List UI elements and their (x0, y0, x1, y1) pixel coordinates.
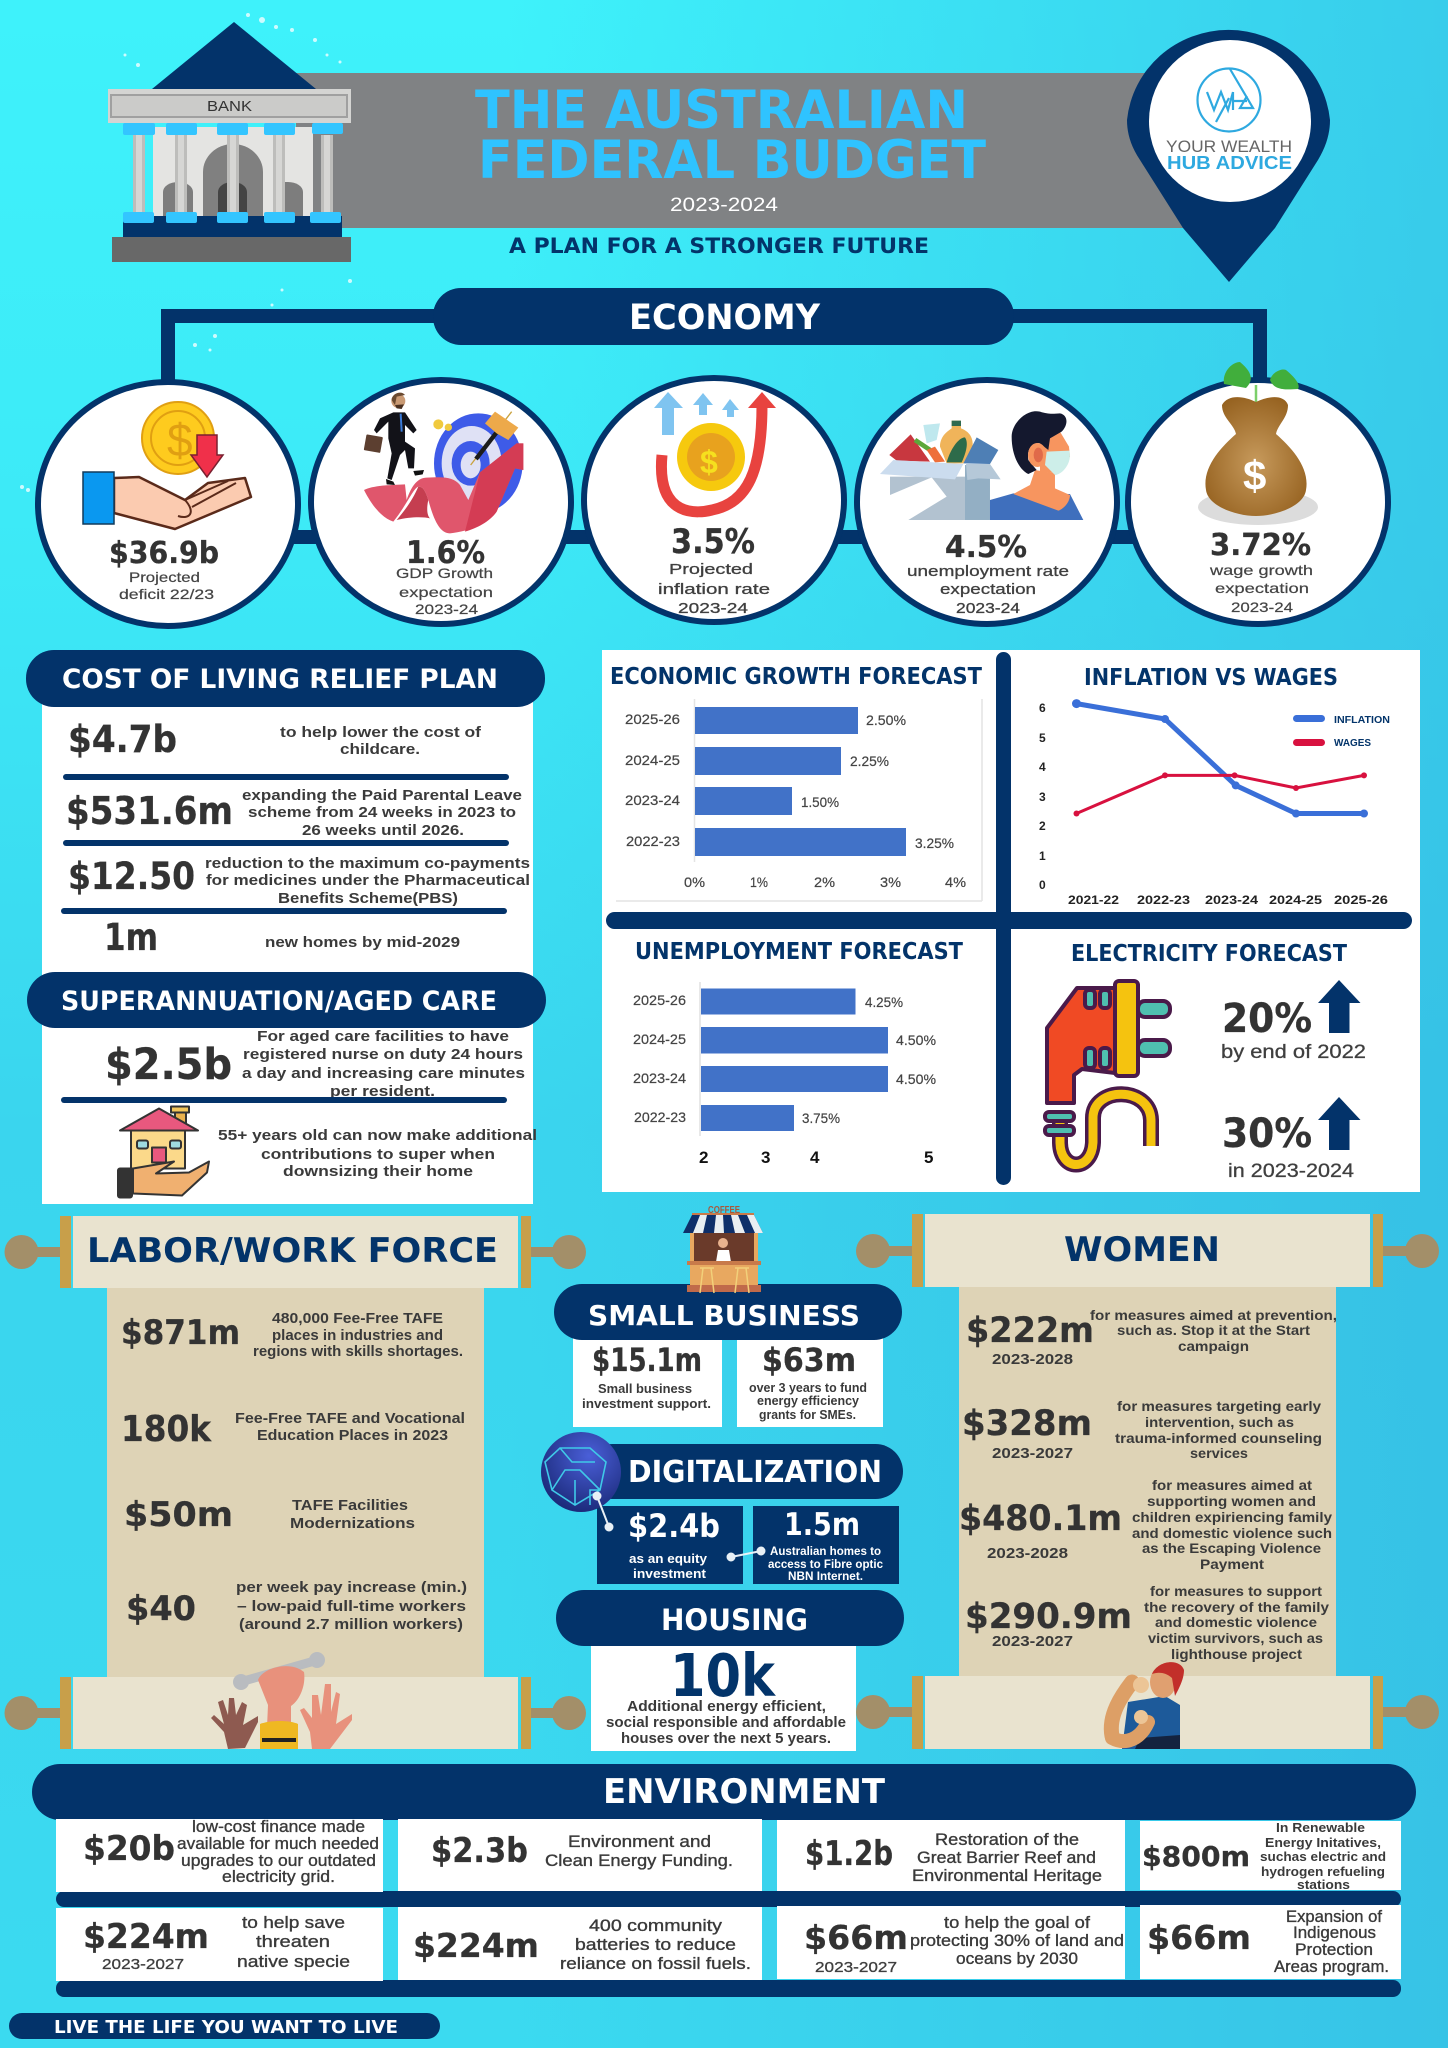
stat: new homes: new homes by mid-2029 (265, 934, 460, 951)
stat: vocational places: 180k (121, 1409, 212, 1450)
panel: gdp growth stat (311, 380, 571, 624)
stat: fee-free TAFE places: places in industries and (272, 1327, 443, 1344)
panel: deficit stat: $36.9b (109, 536, 219, 571)
card: great barrier reef: Great Barrier Reef and (917, 1849, 1096, 1867)
panel: electricity forecast: by end of 2022 (1221, 1042, 1366, 1063)
icon: circuit globe (541, 1432, 621, 1512)
chart: economic growth forecast (610, 664, 982, 901)
card: native species: native specie (237, 1953, 350, 1971)
panel: inflation stat: inflation rate (658, 581, 770, 598)
heading: cost of living relief plan: COST OF LIVING RELIEF PLAN (62, 664, 498, 695)
stat: childcare: childcare. (340, 741, 420, 758)
panel: wage growth stat: expectation (1215, 580, 1309, 596)
header: grey title band (296, 73, 1196, 228)
card: clean energy funding: Environment and (568, 1833, 711, 1851)
chart: inflation vs wages: 6 (1039, 701, 1046, 715)
chart: economic growth forecast: 2.50% (866, 712, 906, 728)
stat: fee-free TAFE places: $871m (121, 1313, 240, 1353)
stat: family violence support: supporting women and (1147, 1493, 1316, 1509)
stat: vocational places: Fee-Free TAFE and Vocational (235, 1410, 465, 1427)
stat: survivors recovery: for measures to support (1150, 1583, 1322, 1599)
chart: economic growth forecast: ECONOMIC GROWTH FORECAST (610, 664, 982, 690)
chart: economic growth forecast: 2023-24 (625, 792, 680, 808)
chart: inflation vs wages: 2022-23 (1137, 893, 1190, 907)
card: renewable energy: In Renewable (1276, 1820, 1365, 1835)
panel: electricity forecast (1045, 941, 1366, 1182)
stat: investment support: Small business (598, 1381, 692, 1396)
panel: inflation stat: 2023-24 (678, 600, 748, 617)
panel: electricity forecast: 20% (1222, 996, 1312, 1042)
text: housing detail: Additional energy efficient, (627, 1698, 826, 1715)
stat: medicines: Benefits Scheme(PBS) (278, 890, 458, 907)
heading: environment: ENVIRONMENT (603, 1772, 886, 1812)
stat: aged care: a day and increasing care minutes (242, 1065, 525, 1082)
chart: economic growth forecast: 3% (880, 874, 901, 890)
card: renewable energy: hydrogen refueling (1261, 1864, 1385, 1879)
stat: parental leave: 26 weeks until 2026. (302, 822, 464, 839)
stat: pay increase: per week pay increase (min.) (236, 1579, 467, 1596)
stat: fee-free TAFE places (121, 1310, 463, 1360)
heading: superannuation aged care: SUPERANNUATION/AGED CARE (61, 986, 497, 1017)
subtitle: year: 2023-2024 (670, 195, 778, 216)
icon: money bag with sprout: $ (1243, 452, 1266, 499)
stat: prevention: 2023-2028 (992, 1351, 1073, 1368)
chart: unemployment forecast: UNEMPLOYMENT FORECAST (635, 939, 963, 965)
card: native species: to help save (242, 1914, 345, 1932)
card: protecting land and oceans: oceans by 2030 (956, 1950, 1078, 1968)
panel: small business (554, 1205, 902, 1427)
stat: aged care: registered nurse on duty 24 hours (243, 1046, 523, 1063)
card: grid upgrades: electricity grid. (222, 1868, 335, 1886)
icon: electric plug (1045, 981, 1170, 1164)
panel: electricity forecast: 30% (1222, 1111, 1312, 1157)
card: grid upgrades: low-cost finance made (192, 1818, 365, 1836)
stat: prevention: campaign (1178, 1338, 1249, 1354)
heading: small business: SMALL BUSINESS (588, 1299, 860, 1332)
card: indigenous protection: $66m (1147, 1918, 1251, 1957)
stat: energy grants (749, 1341, 867, 1422)
stat: aged care: For aged care facilities to have (257, 1028, 509, 1045)
stat: aged care (105, 1028, 525, 1100)
panel: electricity forecast: in 2023-2024 (1228, 1161, 1354, 1182)
stat: fee-free TAFE places: regions with skills shortages. (253, 1343, 463, 1360)
card: grid upgrades: upgrades to our outdated (181, 1852, 376, 1870)
heading: housing: HOUSING (661, 1603, 808, 1637)
chart: inflation vs wages: 4 (1039, 760, 1046, 774)
heading: cost of living relief plan (26, 650, 545, 707)
icon: coin with rising arrows (654, 392, 776, 512)
stat: early intervention: $328m (962, 1404, 1092, 1444)
card: protecting land and oceans: 2023-2027 (815, 1959, 897, 1976)
stat: prevention: $222m (966, 1311, 1094, 1351)
chart: inflation vs wages: WAGES (1334, 738, 1371, 749)
heading: economy: ECONOMY (629, 298, 821, 338)
stat: family violence support: 2023-2028 (987, 1545, 1068, 1562)
panel: electricity forecast: ELECTRICITY FORECAST (1071, 941, 1347, 967)
card: indigenous protection: Protection (1295, 1941, 1373, 1959)
stat: energy grants: $63m (762, 1341, 856, 1379)
heading: women: WOMEN (1064, 1230, 1220, 1270)
panel: wage growth stat: 2023-24 (1231, 599, 1293, 615)
panel: women scroll (856, 1214, 1439, 1749)
card: community batteries: $224m (413, 1926, 539, 1965)
panel: gdp growth stat: 2023-24 (415, 601, 478, 617)
stat: aged care: per resident. (330, 1083, 435, 1100)
icon: coffee stall (683, 1205, 763, 1293)
stat: aged care: $2.5b (105, 1040, 232, 1090)
chart: economic growth forecast: 2025-26 (625, 711, 680, 727)
panel: forecast charts (602, 650, 1420, 1192)
card: native species: $224m (83, 1917, 209, 1957)
chart: unemployment forecast: 3 (761, 1148, 770, 1167)
chart: inflation vs wages: 0 (1039, 878, 1046, 892)
card: grid upgrades (56, 1818, 383, 1892)
stat: survivors recovery: $290.9m (965, 1597, 1132, 1637)
panel: unemployment stat (857, 380, 1117, 624)
panel: inflation stat: 3.5% (671, 522, 755, 562)
chart: inflation vs wages: 2 (1039, 819, 1046, 833)
stat: family violence support: $480.1m (959, 1499, 1122, 1539)
card: community batteries (398, 1907, 762, 1980)
heading: digitalization (585, 1444, 903, 1499)
stat: family violence support: as the Escaping Violence (1142, 1540, 1321, 1556)
stat: early intervention: trauma-informed counseling (1115, 1430, 1322, 1446)
stat: survivors recovery: the recovery of the family (1144, 1599, 1329, 1615)
card: native species: 2023-2027 (102, 1956, 184, 1973)
chart: unemployment forecast: 2025-26 (633, 992, 686, 1008)
card: native species: threaten (256, 1933, 330, 1951)
stat: pay increase: $40 (126, 1589, 196, 1629)
icon: bank building (108, 22, 351, 262)
card: native species (56, 1908, 383, 1981)
text: downsizing contributions: downsizing their home (283, 1163, 473, 1180)
chart: unemployment forecast: 5 (924, 1148, 933, 1167)
panel: wage growth stat: 3.72% (1210, 528, 1311, 563)
stat: pay increase: – low-paid full-time workers (237, 1598, 466, 1615)
panel: cost of living and superannuation (26, 650, 546, 1204)
stat: family violence support: and domestic violence such (1132, 1525, 1332, 1541)
stat: TAFE facilities: TAFE Facilities (292, 1497, 408, 1514)
stat: childcare: $4.7b (68, 718, 177, 761)
chart: unemployment forecast: 2023-24 (633, 1070, 686, 1086)
chart: inflation vs wages: INFLATION (1334, 715, 1390, 726)
icon: money bag with sprout (1198, 362, 1318, 525)
stat: early intervention (962, 1398, 1322, 1462)
card: indigenous protection: Indigenous (1293, 1924, 1376, 1942)
panel: digitalization (541, 1432, 903, 1584)
panel: deficit stat: Projected (129, 569, 200, 585)
heading: economy (433, 288, 1014, 345)
stat: survivors recovery (965, 1583, 1329, 1662)
heading: housing (556, 1590, 904, 1646)
icon: raised hands with wrench (211, 1652, 352, 1749)
text: housing detail (606, 1698, 846, 1747)
chart: inflation vs wages: 2025-26 (1334, 893, 1388, 907)
stat: family violence support (959, 1477, 1332, 1572)
icon: coin over hand (83, 402, 251, 529)
chart: unemployment forecast: 4.50% (896, 1032, 936, 1048)
stat: family violence support: children expiriencing family (1132, 1509, 1332, 1525)
stat: parental leave: $531.6m (66, 789, 233, 833)
footer: slogan pill: LIVE THE LIFE YOU WANT TO LIVE (54, 2017, 398, 2038)
stat: equity investment: $2.4b (628, 1507, 720, 1545)
icon: bank building: BANK (207, 98, 252, 115)
card: great barrier reef: Environmental Heritage (912, 1867, 1102, 1885)
heading: environment (32, 1764, 1416, 1820)
panel: unemployment stat: 4.5% (945, 530, 1027, 565)
icon: location pin logo: YOUR WEALTH (1166, 137, 1292, 156)
stat: investment support: $15.1m (592, 1341, 702, 1379)
text: housing detail: social responsible and affordable (606, 1714, 846, 1731)
stat: equity investment: investment (633, 1566, 707, 1581)
card: grid upgrades: available for much needed (177, 1835, 379, 1853)
card: great barrier reef: Restoration of the (935, 1831, 1079, 1849)
panel: unemployment stat: unemployment rate (907, 563, 1069, 580)
chart: inflation vs wages: 1 (1039, 849, 1046, 863)
chart: unemployment forecast: 2 (699, 1148, 708, 1167)
stat: pay increase (126, 1579, 467, 1633)
stat: fibre homes (768, 1507, 883, 1583)
chart: economic growth forecast: 1.50% (801, 794, 839, 810)
text: downsizing contributions (218, 1127, 537, 1180)
panel: labor and work force scroll (4, 1216, 586, 1749)
card: renewable energy: suchas electric and (1260, 1849, 1386, 1864)
title: FEDERAL BUDGET (478, 130, 986, 191)
chart: economic growth forecast: 2% (814, 874, 835, 890)
stat: energy grants: over 3 years to fund (749, 1380, 867, 1395)
stat: medicines: reduction to the maximum co-payments (205, 855, 530, 872)
heading: small business (554, 1284, 902, 1340)
chart: inflation vs wages: 2021-22 (1068, 893, 1119, 907)
stat: equity investment: as an equity (629, 1551, 708, 1566)
text: downsizing contributions: 55+ years old can now make additional (218, 1127, 537, 1144)
stat: fibre homes: Australian homes to (770, 1544, 881, 1558)
chart: economic growth forecast: 1% (750, 874, 768, 890)
card: community batteries: 400 community (589, 1917, 723, 1935)
panel: deficit stat: deficit 22/23 (119, 586, 214, 602)
stat: energy grants: grants for SMEs. (759, 1407, 856, 1422)
stat: early intervention: for measures targeting early (1117, 1398, 1321, 1414)
stat: new homes (104, 916, 460, 959)
stat: prevention (966, 1307, 1337, 1368)
chart: unemployment forecast: 2022-23 (634, 1109, 686, 1125)
chart: inflation vs wages: 3 (1039, 790, 1046, 804)
stat: fibre homes: NBN Internet. (788, 1569, 863, 1583)
icon: coffee stall: COFFEE (708, 1205, 740, 1216)
card: community batteries: batteries to reduce (575, 1936, 736, 1954)
panel: housing: 10k (670, 1641, 777, 1710)
stat: early intervention: intervention, such as (1145, 1414, 1294, 1430)
panel: inflation stat: Projected (669, 561, 753, 578)
stat: survivors recovery: lighthouse project (1171, 1646, 1302, 1662)
card: community batteries: reliance on fossil fuels. (560, 1955, 751, 1973)
chart: economic growth forecast: 2.25% (850, 753, 889, 769)
stat: fibre homes: 1.5m (784, 1507, 860, 1543)
stat: equity investment (628, 1507, 720, 1581)
panel: gdp growth stat: GDP Growth (396, 565, 493, 581)
heading: digitalization: DIGITALIZATION (628, 1455, 882, 1490)
heading: superannuation aged care (27, 972, 546, 1028)
icon: woman flexing arm (1111, 1662, 1184, 1749)
panel: wage growth stat (1128, 362, 1388, 624)
chart: unemployment forecast: 4 (810, 1148, 820, 1167)
stat: medicines: $12.50 (68, 855, 195, 898)
economy connector lines (168, 316, 1260, 382)
panel: housing (556, 1590, 904, 1751)
icon: businessman target and arrow (364, 393, 523, 533)
stat: TAFE facilities: Modernizations (290, 1515, 415, 1532)
chart: inflation vs wages: 2024-25 (1269, 893, 1322, 907)
icon: up arrow (1318, 1097, 1360, 1150)
chart: economic growth forecast: 3.25% (915, 835, 954, 851)
panel: unemployment stat: expectation (940, 581, 1036, 598)
stat: medicines: for medicines under the Pharmaceutical (206, 872, 530, 889)
icon: coin over hand: $ (167, 414, 193, 466)
tagline: A PLAN FOR A STRONGER FUTURE (509, 234, 929, 258)
stat: childcare (68, 718, 482, 761)
chart: economic growth forecast: 2022-23 (626, 833, 680, 849)
card: great barrier reef: $1.2b (805, 1834, 893, 1874)
footer: slogan pill (9, 2013, 440, 2039)
chart: economic growth forecast: 0% (684, 874, 705, 890)
icon: grocery box and masked person (880, 411, 1083, 520)
panel: environment (32, 1764, 1416, 1997)
economy connector between circles (168, 530, 1258, 544)
panel: wage growth stat: wage growth (1209, 562, 1313, 578)
card: protecting land and oceans: protecting 30% of land and (910, 1932, 1124, 1950)
stat: parental leave (66, 787, 522, 839)
icon: house on a hand (118, 1106, 209, 1198)
stat: parental leave: scheme from 24 weeks in 2023 to (248, 804, 516, 821)
stat: medicines (68, 855, 530, 907)
stat: investment support: investment support. (582, 1396, 711, 1411)
text: housing detail: houses over the next 5 years. (621, 1730, 831, 1747)
chart: economic growth forecast: 4% (945, 874, 966, 890)
stat: vocational places: Education Places in 2023 (257, 1427, 448, 1444)
card: indigenous protection (1140, 1905, 1401, 1979)
card: grid upgrades: $20b (83, 1829, 175, 1869)
stat: family violence support: for measures aimed at (1152, 1477, 1312, 1493)
stat: vocational places (121, 1409, 465, 1450)
stat: pay increase: (around 2.7 million workers) (239, 1616, 463, 1633)
stat: TAFE facilities: $50m (124, 1495, 233, 1535)
network node lines (594, 1492, 764, 1560)
card: protecting land and oceans (777, 1906, 1125, 1979)
stat: prevention: such as. Stop it at the Start (1117, 1322, 1310, 1338)
stat: fee-free TAFE places: 480,000 Fee-Free TAFE (272, 1310, 443, 1327)
stat: new homes: 1m (104, 916, 158, 959)
icon: up arrow (1318, 980, 1360, 1033)
chart: inflation vs wages: 2023-24 (1205, 893, 1258, 907)
stat: investment support (582, 1341, 711, 1411)
stat: family violence support: Payment (1200, 1556, 1264, 1572)
card: clean energy funding: $2.3b (431, 1831, 528, 1871)
panel: deficit stat (38, 382, 298, 626)
heading: labor work force: LABOR/WORK FORCE (87, 1231, 498, 1271)
panel: inflation stat (584, 378, 844, 622)
chart: economic growth forecast: 2024-25 (625, 752, 680, 768)
card: clean energy funding: Clean Energy Funding. (545, 1852, 733, 1870)
card: great barrier reef (777, 1820, 1125, 1891)
stat: prevention: for measures aimed at prevention, (1090, 1307, 1337, 1323)
chart: unemployment forecast (633, 939, 963, 1167)
card: renewable energy: $800m (1142, 1840, 1250, 1873)
stat: energy grants: energy efficiency (757, 1393, 860, 1408)
chart: unemployment forecast: 3.75% (802, 1110, 840, 1126)
card: clean energy funding (398, 1819, 762, 1891)
panel: gdp growth stat: expectation (399, 584, 493, 600)
card: protecting land and oceans: to help the goal of (944, 1914, 1090, 1932)
panel: gdp growth stat: 1.6% (406, 535, 485, 571)
card: renewable energy: Energy Initatives, (1265, 1835, 1381, 1850)
icon: location pin logo: HUB ADVICE (1167, 153, 1292, 173)
card: renewable energy (1140, 1820, 1401, 1892)
text: downsizing contributions: contributions to super when (261, 1146, 495, 1163)
chart: unemployment forecast: 4.50% (896, 1071, 936, 1087)
stat: early intervention: services (1190, 1445, 1248, 1461)
card: protecting land and oceans: $66m (804, 1918, 908, 1957)
stat: early intervention: 2023-2027 (992, 1445, 1073, 1462)
card: indigenous protection: Expansion of (1286, 1908, 1382, 1926)
stat: childcare: to help lower the cost of (280, 724, 482, 741)
panel: unemployment stat: 2023-24 (956, 600, 1020, 617)
title: THE AUSTRALIAN (475, 80, 968, 141)
chart: inflation vs wages (1039, 665, 1390, 907)
stat: TAFE facilities (124, 1495, 415, 1535)
stat: survivors recovery: and domestic violence (1155, 1614, 1317, 1630)
chart: inflation vs wages: INFLATION VS WAGES (1084, 665, 1338, 691)
title (475, 80, 986, 191)
chart: inflation vs wages: 5 (1039, 731, 1046, 745)
card: indigenous protection: Areas program. (1274, 1958, 1389, 1976)
icon: location pin logo (1127, 30, 1330, 282)
stat: fibre homes: access to Fibre optic (768, 1557, 883, 1571)
card: renewable energy: stations (1297, 1877, 1350, 1892)
chart: unemployment forecast: 4.25% (865, 994, 903, 1010)
chart: unemployment forecast: 2024-25 (633, 1031, 686, 1047)
icon: coin with rising arrows: $ (700, 444, 718, 480)
stat: survivors recovery: 2023-2027 (992, 1633, 1073, 1650)
stat: survivors recovery: victim survivors, such as (1148, 1630, 1323, 1646)
stat: parental leave: expanding the Paid Parental Leave (242, 787, 522, 804)
